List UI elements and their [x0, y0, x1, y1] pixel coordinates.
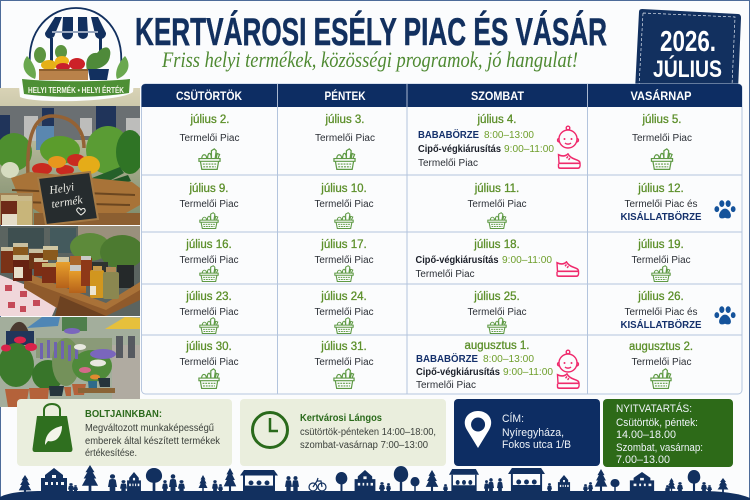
week 3: Cipő-végkiárusítás	[416, 255, 499, 266]
panel: address: Fokos utca 1/B	[502, 439, 571, 451]
week 4: Termelői Piac	[314, 307, 374, 318]
panel: shops	[17, 399, 232, 466]
week 1: 8:00–13:00	[484, 129, 534, 141]
week 2: július 9.	[188, 183, 228, 195]
week 3: július 18.	[473, 239, 520, 251]
week 3: Termelői Piac	[632, 255, 690, 266]
week 1: Termelői Piac	[315, 133, 375, 144]
week 1: 9:00–11:00	[504, 143, 554, 155]
week 1: Termelői Piac	[180, 133, 240, 144]
week 5: Termelői Piac	[632, 357, 692, 368]
logo	[18, 7, 135, 101]
panel: opening hours: 14.00–18.00	[616, 429, 676, 441]
week 3: 9:00–11:00	[502, 254, 552, 266]
icon: clock	[252, 412, 288, 448]
icon: bicycle	[309, 478, 326, 491]
week 4: Termelői Piac	[468, 307, 526, 318]
week 2: Termelői Piac és	[624, 199, 698, 210]
panel: address: CÍM:	[502, 412, 524, 425]
week 5: 9:00–11:00	[503, 366, 553, 378]
week 5: Termelői Piac	[314, 357, 374, 368]
week 5: Termelői Piac	[416, 380, 476, 391]
week 5: augusztus 2.	[629, 341, 693, 353]
panel: opening hours: 7.00–13.00	[616, 454, 670, 466]
week 3: július 17.	[320, 239, 367, 251]
panel: opening hours: NYITVATARTÁS:	[616, 402, 692, 415]
week 1: BABABÖRZE	[418, 128, 479, 141]
date badge	[635, 9, 741, 90]
logo: HELYI TERMÉK • HELYI ÉRTÉK	[28, 86, 124, 95]
week 4: július 23.	[185, 291, 232, 303]
week 1: Cipő-végkiárusítás	[418, 144, 501, 155]
logo produce	[24, 45, 128, 80]
panel: opening hours: Szombat, vasárnap:	[616, 442, 703, 454]
week 4	[180, 291, 736, 334]
panel: address	[454, 399, 600, 466]
panel: lángos: szombat-vasárnap 7:00–13:00	[300, 440, 428, 451]
table header: SZOMBAT	[471, 91, 524, 103]
photo: basket of vegetables	[0, 88, 144, 225]
calendar table	[142, 84, 742, 394]
week 1	[180, 114, 692, 169]
logo arch	[30, 8, 121, 66]
week 4: KISÁLLATBÖRZE	[620, 318, 702, 331]
photo: flower market	[0, 317, 140, 407]
week 2: Termelői Piac	[468, 199, 526, 210]
week 1: július 5.	[642, 114, 682, 126]
week 5: Termelői Piac	[180, 357, 238, 368]
panel: shops: értékesítése.	[85, 448, 137, 459]
table header	[142, 84, 742, 107]
week 3: Termelői Piac	[314, 255, 374, 266]
photo: basket of vegetables: Helyi	[48, 181, 75, 197]
week 4: július 24.	[320, 291, 367, 303]
week 2: július 11.	[474, 183, 519, 195]
week 5: július 31.	[320, 341, 367, 353]
table header: CSÜTÖRTÖK	[176, 90, 243, 103]
icon: shopping bag	[32, 404, 72, 452]
week 5: BABABÖRZE	[416, 352, 478, 365]
week 3: július 19.	[637, 239, 684, 251]
week 4: július 26.	[637, 291, 684, 303]
week 1: július 2.	[190, 114, 230, 126]
panel: shops: emberek által készített termékek	[85, 436, 221, 447]
logo banner	[22, 79, 130, 97]
week 2: Termelői Piac	[314, 199, 374, 210]
week 3: július 16.	[185, 239, 232, 251]
week 5: 8:00–13:00	[483, 353, 534, 365]
table body	[142, 84, 742, 394]
week 5: július 30.	[185, 341, 232, 353]
panel: shops: BOLTJAINKBAN:	[85, 408, 162, 420]
week 2: július 10.	[320, 183, 367, 195]
week 3	[180, 239, 690, 282]
table header: VASÁRNAP	[630, 90, 692, 103]
week 1: július 4.	[476, 114, 516, 126]
week 5: Cipő-végkiárusítás	[416, 367, 500, 378]
week 5	[180, 340, 693, 391]
week 4: július 25.	[473, 291, 520, 303]
week 2: Termelői Piac	[180, 199, 238, 210]
panel: opening hours: Csütörtök, péntek:	[616, 417, 698, 429]
panel: lángos: csütörtök-pénteken 14:00–18:00,	[300, 427, 436, 438]
date badge: JÚLIUS	[653, 55, 722, 83]
panel: lángos: Kertvárosi Lángos	[300, 413, 382, 424]
panel: address: Nyíregyháza,	[502, 427, 564, 439]
week 5: augusztus 1.	[464, 340, 530, 352]
week 1: Termelői Piac	[632, 133, 692, 144]
week 4: Termelői Piac és	[624, 307, 698, 318]
week 1: július 3.	[324, 114, 364, 126]
table header: PÉNTEK	[324, 90, 366, 103]
panel: lángos	[240, 399, 446, 466]
skyline	[0, 465, 750, 500]
week 2: július 12.	[637, 183, 684, 195]
week 1: Termelői Piac	[418, 158, 478, 169]
photo: basket of vegetables: termék	[51, 194, 84, 211]
week 3: Termelői Piac	[180, 255, 238, 266]
subtitle: Friss helyi termékek, közösségi programok, jó hangulat!	[161, 47, 578, 72]
logo awning	[45, 17, 106, 62]
week 4: Termelői Piac	[180, 307, 238, 318]
icon: location pin	[465, 411, 491, 448]
logo white badge	[18, 7, 135, 101]
date badge: 2026.	[660, 26, 716, 58]
panel: shops: Megváltozott munkaképességű	[85, 423, 214, 434]
week 2	[180, 183, 736, 229]
panel: opening hours	[603, 399, 733, 467]
week 3: Termelői Piac	[416, 269, 474, 280]
week 2: KISÁLLATBÖRZE	[620, 210, 702, 223]
photo: jars and herbs	[0, 226, 144, 316]
